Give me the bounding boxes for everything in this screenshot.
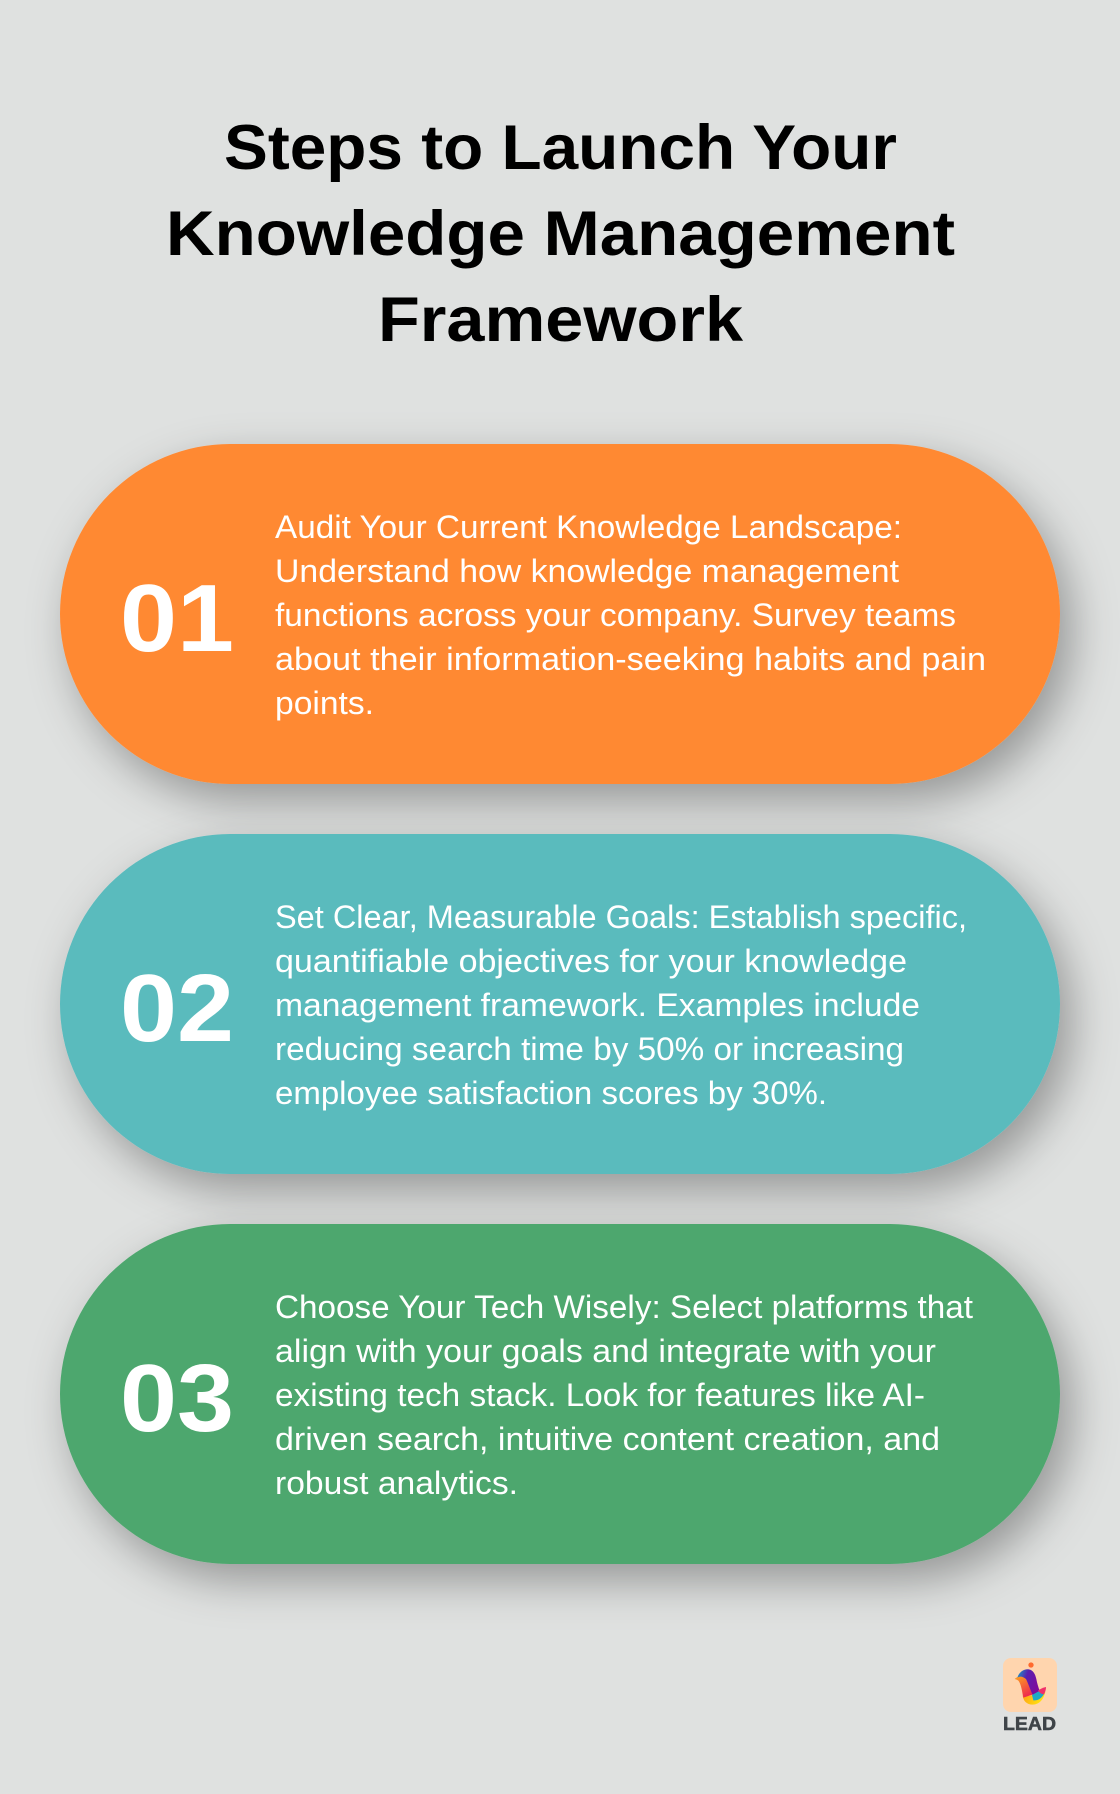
pill background teal xyxy=(60,834,1060,1174)
panel: step 03 xyxy=(60,1224,1060,1564)
step 02 text: reducing search time by 50% or increasing xyxy=(275,1031,904,1067)
step 02 text: Set Clear, Measurable Goals: Establish specific, xyxy=(275,899,967,935)
step 01 text: about their information-seeking habits and pain xyxy=(275,641,986,677)
step 03 text xyxy=(275,1289,973,1501)
pill background green xyxy=(60,1224,1060,1564)
step 01 text: Audit Your Current Knowledge Landscape: xyxy=(275,509,902,545)
step 03 text: driven search, intuitive content creation, and xyxy=(275,1421,940,1457)
logo wordmark: LEAD xyxy=(1003,1714,1056,1734)
step 02 text: employee satisfaction scores by 30%. xyxy=(275,1075,827,1111)
step 02 text: management framework. Examples include xyxy=(275,987,920,1023)
step 01 text: Understand how knowledge management xyxy=(275,553,899,589)
step 01 text: points. xyxy=(275,685,374,721)
step 02 text xyxy=(275,899,967,1111)
logo: LEAD xyxy=(1003,1658,1057,1734)
panel: step 02 xyxy=(60,834,1060,1174)
title: Knowledge Management xyxy=(166,199,955,269)
pill background orange xyxy=(60,444,1060,784)
title xyxy=(166,113,955,355)
step number 01: 01 xyxy=(120,565,234,672)
logo tile xyxy=(1003,1658,1057,1712)
step 01 text: functions across your company. Survey teams xyxy=(275,597,956,633)
step 01 text xyxy=(275,509,986,721)
step 02 text: quantifiable objectives for your knowledge xyxy=(275,943,907,979)
step 03 text: robust analytics. xyxy=(275,1465,518,1501)
step 03 text: Choose Your Tech Wisely: Select platforms that xyxy=(275,1289,973,1325)
step number 02: 02 xyxy=(120,955,234,1062)
panel: step 01 xyxy=(60,444,1060,784)
step 03 text: existing tech stack. Look for features like AI- xyxy=(275,1377,925,1413)
icon: bird mark xyxy=(1015,1662,1046,1705)
title: Steps to Launch Your xyxy=(224,113,897,183)
step 03 text: align with your goals and integrate with your xyxy=(275,1333,936,1369)
title: Framework xyxy=(378,285,744,355)
step number 03: 03 xyxy=(120,1345,234,1452)
